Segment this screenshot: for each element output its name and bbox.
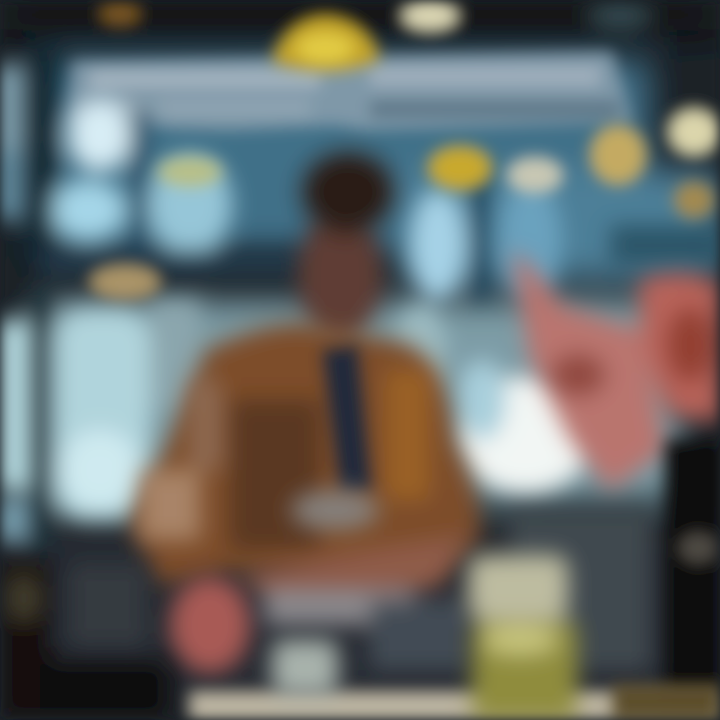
pendant lamps (89, 0, 720, 300)
small glass (272, 640, 338, 696)
jacket (130, 323, 479, 585)
lamp: shelf yellow (158, 157, 222, 187)
lamp: top yellow (272, 15, 380, 72)
shirt (291, 490, 379, 530)
lamp: right amber (590, 125, 646, 185)
forearm and hands (170, 535, 470, 673)
man (130, 152, 479, 673)
lamp: far right white (668, 108, 720, 156)
sign: blurred heading band (70, 52, 632, 130)
lamp: lower left amber (89, 264, 161, 300)
lamp: top right (586, 2, 654, 30)
table (190, 692, 720, 720)
lamp: middle white (507, 157, 563, 193)
hair (302, 152, 394, 232)
dark right lower block (665, 440, 720, 720)
right column glass panels (394, 170, 720, 493)
pink hands at right (512, 250, 720, 490)
lamp: top left amber (98, 2, 142, 26)
lamp: far right amber (674, 182, 714, 218)
jacket shading (140, 370, 430, 550)
tie (322, 345, 372, 495)
beer glass (468, 555, 577, 720)
lamp: top white (400, 0, 460, 32)
left column glass panels (0, 50, 300, 560)
neck and face (298, 210, 382, 340)
table right tint (612, 685, 720, 720)
lamp: middle yellow (428, 146, 492, 190)
lower left dark stool area (0, 510, 650, 720)
